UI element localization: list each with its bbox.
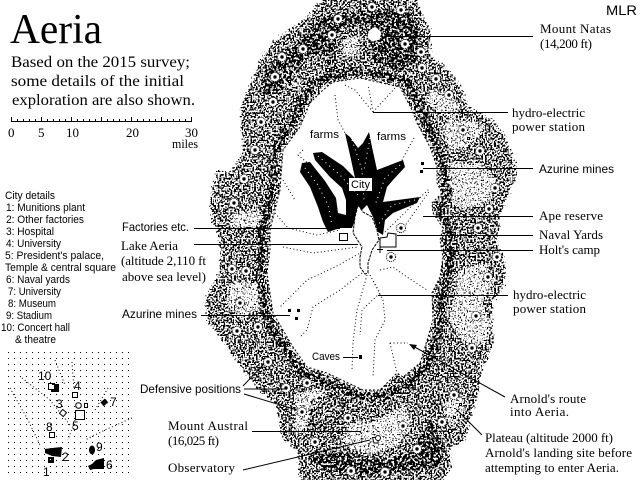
- labels: left side: [121, 220, 248, 475]
- subtitle: Based on the 2015 survey;: [11, 54, 190, 71]
- city details list: 2: Other factories: [6, 214, 84, 226]
- dense southern ridge: [305, 410, 448, 478]
- label: Naval Yards: Naval Yards: [539, 227, 603, 242]
- dense northern highlands: [258, 6, 422, 100]
- city details list: 6: Naval yards: [6, 274, 70, 286]
- city details list: [1, 190, 116, 346]
- city details list: 7: University: [8, 286, 61, 298]
- mountain ring stipple: [205, 0, 516, 480]
- markers: [252, 60, 470, 432]
- city details list: 4: University: [6, 238, 61, 250]
- scale bar: [8, 117, 198, 151]
- label: plateau and landing site: attempting to enter Aeria.: [485, 460, 619, 475]
- scale bar: 5: [38, 125, 44, 140]
- light patch: south-east: [445, 258, 498, 352]
- scale bar: 0: [8, 125, 14, 140]
- subtitle: some details of the initial: [11, 73, 185, 90]
- title: Aeria: [10, 7, 102, 53]
- city details list: & theatre: [15, 334, 56, 346]
- scale bar: miles: [172, 136, 198, 151]
- crater on Mount Natas: [367, 26, 382, 42]
- label: Defensive positions: Defensive positions: [140, 382, 241, 396]
- scale bar: 20: [126, 125, 139, 140]
- label: hydro-electric power station north: power station: [512, 119, 586, 134]
- 9: stadium: 9: [96, 440, 103, 454]
- label: hydro-electric power station north: [512, 105, 586, 134]
- label: hydro-electric power station south: [513, 287, 586, 316]
- dense blocky band along the valley wall: [259, 71, 451, 397]
- label: hydro-electric power station south: power station: [513, 301, 586, 316]
- label: Mount Austral: Mount Austral: [168, 418, 248, 433]
- 10: concert hall and theatre: 10: [38, 369, 52, 383]
- label: Arnold's route: into Aeria.: [510, 404, 569, 419]
- valley defensive positions: [386, 223, 406, 262]
- label: Mount Natas: Mount Natas: [540, 21, 611, 36]
- naval yards outline: [380, 233, 396, 247]
- scale bar: 30: [185, 125, 198, 140]
- city inset map: [7, 351, 133, 479]
- leader lines: [194, 36, 533, 432]
- valley road network: [275, 85, 430, 377]
- city label: City: [351, 179, 370, 191]
- dotted roads: [275, 85, 430, 377]
- label: hydro-electric power station north: hydro-electric: [512, 105, 585, 120]
- map: mountain ring around the valley: [205, 0, 516, 480]
- farms labels: farms: [310, 129, 340, 141]
- city details list: 3: Hospital: [6, 226, 54, 238]
- defensive positions on the ring: [227, 2, 502, 477]
- light patch: north central: [340, 30, 362, 60]
- label: plateau and landing site: Arnold's landing site before: [485, 445, 632, 460]
- 2: other factories: 2: [62, 450, 69, 464]
- light patch: west: [228, 206, 266, 232]
- label: Lake Aeria: above sea level): [122, 269, 206, 284]
- label: Lake Aeria: [121, 238, 206, 284]
- label: Azurine mines west: Azurine mines: [122, 307, 197, 321]
- city districts (black fingers): [300, 132, 420, 235]
- label: Holt's camp: Holt's camp: [539, 242, 600, 257]
- angled leader lines: [243, 364, 482, 470]
- light patch: below the valley: [292, 384, 332, 438]
- label: Lake Aeria: Lake Aeria: [121, 238, 178, 253]
- subtitle: [11, 54, 195, 109]
- light patch: east shelf: [438, 115, 490, 155]
- arrow: Arnold's route into Aeria: [409, 344, 505, 397]
- label: plateau and landing site: [485, 430, 632, 475]
- label: Mount Austral: [168, 418, 248, 448]
- light plateau patches: [222, 30, 500, 458]
- label: Factories etc.: Factories etc.: [122, 220, 189, 234]
- 4: university: 4: [74, 379, 81, 393]
- Holt's camp cross: [377, 246, 383, 253]
- MLR credit: MLR: [606, 2, 637, 18]
- label: Mount Natas: (14,200 ft): [540, 36, 592, 51]
- 8: museum: 8: [46, 420, 53, 434]
- valley floor edge: [267, 78, 443, 390]
- light patch: plateau: [440, 392, 468, 432]
- city details list: City details: [5, 190, 55, 202]
- 6: naval yards: 6: [106, 458, 113, 472]
- city details list: 9: Stadium: [6, 310, 52, 322]
- small hollow markers in the highlands: [252, 60, 470, 432]
- light patch: south-west: [222, 276, 266, 322]
- label: hydro-electric power station south: hydro-electric: [513, 287, 586, 302]
- city details list: 1: Munitions plant: [6, 202, 85, 214]
- inset roads: [10, 360, 132, 445]
- light patch: north-west basin: [276, 58, 304, 96]
- city details list: 5: President's palace,: [5, 250, 104, 262]
- factories square: [340, 234, 348, 240]
- label: Ape reserve: Ape reserve: [539, 208, 603, 223]
- farms labels: [310, 129, 407, 143]
- label: Lake Aeria: (altitude 2,110 ft: [121, 253, 206, 268]
- city details list: 8: Museum: [8, 298, 56, 310]
- label: Mount Natas: [540, 21, 611, 51]
- light patch: north-east: [422, 85, 466, 118]
- city: [300, 132, 420, 235]
- azurine mine markers: [288, 162, 424, 320]
- label: plateau and landing site: Plateau (altitude 2000 ft): [485, 430, 613, 445]
- Mount Austral crater ridge: [310, 395, 345, 428]
- caves marker and label: [312, 351, 362, 363]
- label: Azurine mines east: Azurine mines: [539, 162, 614, 176]
- city details list: Temple & central square: [5, 262, 116, 274]
- Lake Aeria: [353, 205, 379, 274]
- labels: right side: [485, 21, 632, 475]
- observatory marker: [372, 436, 380, 443]
- city details list: 10: Concert hall: [1, 322, 70, 334]
- label: Observatory: Observatory: [168, 460, 236, 475]
- 1: munitions plant: 1: [43, 465, 50, 479]
- 7: university: 7: [110, 395, 117, 409]
- farms labels: farms: [377, 131, 407, 143]
- label: Mount Austral: (16,025 ft): [168, 433, 219, 448]
- white dotted streets: [305, 138, 415, 225]
- light patch: east ape reserve: [443, 158, 500, 214]
- caves marker and label: Caves: [312, 351, 340, 363]
- 3: hospital: 3: [56, 397, 63, 411]
- subtitle: exploration are also shown.: [12, 92, 195, 109]
- 5: palace, temple and square: 5: [72, 419, 79, 433]
- label: Arnold's route: [510, 391, 586, 419]
- scale bar: 10: [66, 125, 79, 140]
- label: Arnold's route: Arnold's route: [510, 391, 586, 406]
- light patch: around the observatory: [340, 400, 416, 458]
- dot grid background: [7, 351, 133, 477]
